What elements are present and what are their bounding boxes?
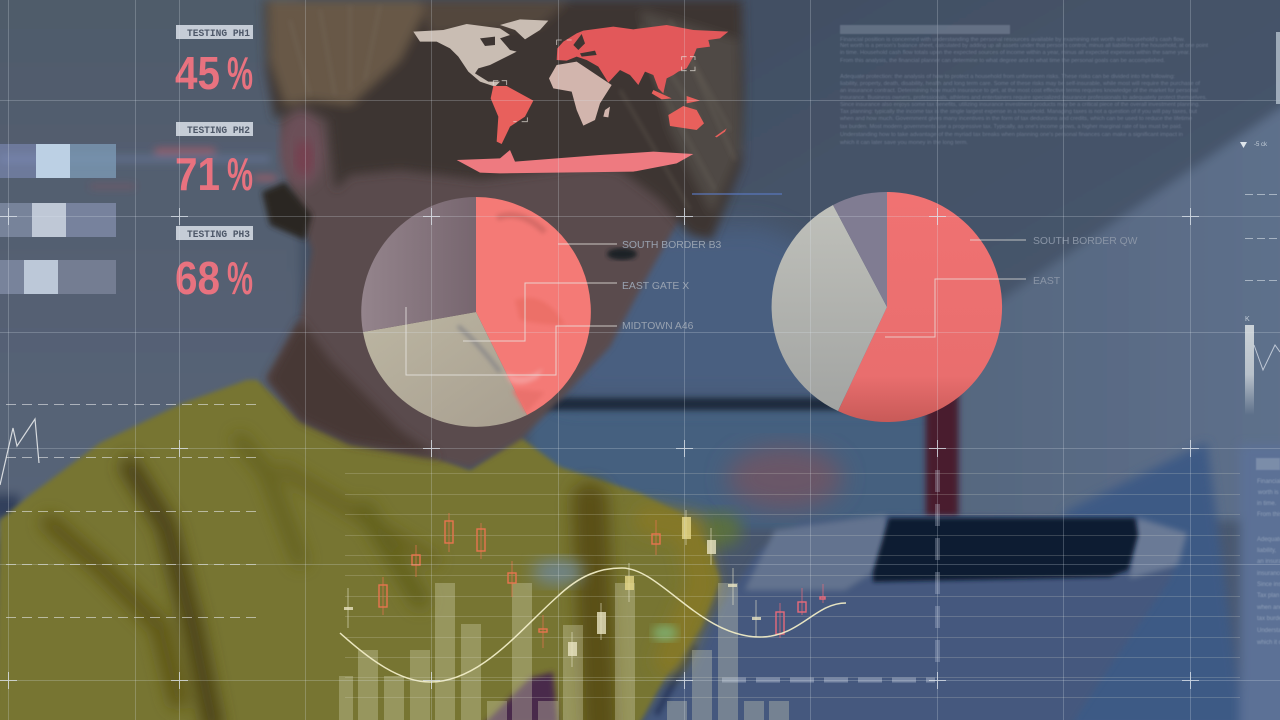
stat: testing phase 2: % (227, 148, 253, 200)
map focus brackets (493, 40, 695, 122)
vertical gauge (1245, 325, 1254, 415)
left bar indicators (0, 144, 116, 294)
hair strands (290, 5, 735, 210)
shirt (0, 380, 720, 720)
madagascar (603, 107, 610, 117)
eurasia (557, 25, 728, 93)
pie label: east gate x: EAST GATE X (622, 281, 689, 292)
pie slice: grey (361, 197, 476, 332)
pie slice: red (476, 197, 591, 415)
top right text block: liability, property, death, disability, health and long term care. Some of these risks may be self-insurable, while most will require the purchase of (840, 81, 1201, 87)
candlestick bodies: pink (776, 597, 825, 634)
stat: testing phase 1 (175, 25, 253, 99)
small readout (1240, 142, 1268, 148)
stat: testing phase 1: 45 (175, 47, 220, 99)
plant (698, 512, 742, 548)
right cropped text block: liability, (1257, 548, 1277, 554)
baltic inlet (573, 34, 585, 50)
leader lines (885, 240, 1026, 337)
top right text block: Since insurance also enjoys some tax benefits, utilizing insurance investment products may be a critical piece of the overall investment planning. (840, 102, 1200, 108)
leader lines (406, 244, 617, 375)
candlestick bodies: outlined (379, 521, 660, 632)
wall behind the face (560, 225, 930, 400)
top right text block: when and how much. Government gives many incentives in the form of tax deductions and credits, which can be used to reduce the lifetime (839, 116, 1192, 122)
face seen through the pie (458, 215, 565, 413)
right mini line chart (1254, 345, 1280, 370)
black sea and caspian (580, 51, 597, 57)
head and neck (267, 60, 700, 468)
green reflection (652, 625, 678, 641)
stat: testing phase 2 (175, 122, 253, 200)
small readout: -5 ck (1254, 142, 1268, 148)
hudson bay (480, 37, 495, 46)
right dashed lines (1245, 194, 1280, 280)
candlestick wicks (348, 510, 823, 667)
south america (491, 86, 533, 144)
top right scroll bar (1276, 32, 1280, 104)
testing phase stats (175, 25, 253, 304)
pie chart left (361, 197, 722, 427)
bar row 1 (0, 144, 116, 178)
stat: testing phase 1: TESTING PH1 (187, 28, 250, 40)
left flare streaks (0, 148, 276, 189)
stat: testing phase 3: % (227, 252, 253, 304)
top right text block: Tax planning: typically the income tax is the single largest expense in a household. Managing taxes is not a question of if you will pay taxes, but (840, 109, 1198, 115)
pie slice: light grey (772, 205, 887, 411)
eye (607, 248, 637, 260)
light patch on shirt (532, 559, 584, 585)
antarctica (457, 150, 693, 173)
pie label: south border qw: SOUTH BORDER QW (1033, 236, 1138, 247)
stat: testing phase 2: 71 (175, 148, 220, 200)
pie label: south border b3: SOUTH BORDER B3 (622, 240, 722, 251)
blue panel right of the tablet (1064, 442, 1280, 720)
dark hair tuft behind ear (262, 182, 312, 240)
bar row 2 (0, 203, 116, 237)
hair (264, 0, 744, 240)
right cropped text block: in time. (1257, 501, 1277, 507)
tablet dark strip (873, 518, 1138, 582)
africa (549, 62, 612, 126)
pie label: east: EAST (1033, 276, 1061, 287)
blue flare line (692, 193, 782, 195)
top right text block: insurance. Business owners, professionals, athletes and entertainers require specialized insurance professionals to adequately protect themselves. (840, 95, 1207, 101)
top right text block: an insurance contract. Determining how much insurance to get, at the most cost effective terms requires knowledge of the market for personal (840, 88, 1198, 94)
left dashed lines and mini line chart (0, 404, 256, 618)
text block heading bar (840, 25, 1010, 34)
top right text block: Financial position is concerned with understanding the personal resources available by examining net worth and household's cash flow. (840, 37, 1185, 43)
pie label: midtown a46: MIDTOWN A46 (622, 321, 694, 332)
bottom dashed axes (722, 470, 938, 680)
right cropped text block (1256, 458, 1280, 646)
right edge indicators: K (1245, 316, 1250, 323)
pie slice: red (838, 192, 1002, 422)
top right text block: Net worth is a person's balance sheet, calculated by adding up all assets under that person's control, minus all liabilities of the household, at one point (840, 43, 1209, 49)
southeast asia islands (652, 90, 672, 99)
top right text block (839, 25, 1209, 146)
tablet body (640, 515, 1187, 720)
right cropped text block: worth is (1257, 490, 1279, 496)
stat: testing phase 3 (175, 226, 253, 304)
australia (668, 106, 704, 130)
bar row 3 (0, 260, 116, 294)
mini line chart (0, 419, 39, 485)
shirt folds (50, 440, 702, 720)
stat: testing phase 2: TESTING PH2 (187, 125, 250, 137)
top right text block: Adequate protection: the analysis of how to protect a household from unforeseen risks. These risks can be divided into the following: (840, 74, 1175, 80)
stat: testing phase 1: % (227, 47, 253, 99)
north america (413, 24, 517, 87)
pie slice: cream (363, 312, 527, 427)
top right text block: which it can later save you money in the long term. (839, 140, 968, 146)
top right text block: Understanding how to take advantage of the myriad tax breaks when planning one's personal finances can make a significant impact in (840, 132, 1183, 138)
right edge indicators (1240, 32, 1280, 646)
candlestick bodies: filled (344, 517, 761, 656)
new zealand (715, 128, 727, 137)
ear (280, 112, 324, 188)
bottom chart (339, 474, 1240, 720)
hand (483, 672, 558, 720)
volume bars (339, 583, 789, 720)
stat: testing phase 3: 68 (175, 252, 220, 304)
right cropped text block: Tax plan (1257, 593, 1279, 599)
top right text block: From this analysis, the financial planner can determine to what degree and in what time the personal goals can be accomplished. (840, 58, 1165, 64)
pie slice: mauve (833, 192, 887, 307)
stat: testing phase 3: TESTING PH3 (187, 229, 250, 241)
chart rules (345, 474, 1240, 698)
top right text block: in time. Household cash flow totals upon the expected sources of income within a year, minus all expected expenses within the same year. (840, 50, 1190, 56)
trend curve (340, 568, 846, 682)
window frame and post (530, 385, 958, 520)
poster blob (727, 446, 843, 510)
greenland (500, 19, 548, 39)
top right text block: tax burden. Most modern governments use a progressive tax. Typically, as one's income grows, a higher marginal rate of tax must be paid. (840, 124, 1182, 130)
pie chart right (772, 192, 1138, 422)
world map (413, 19, 728, 173)
